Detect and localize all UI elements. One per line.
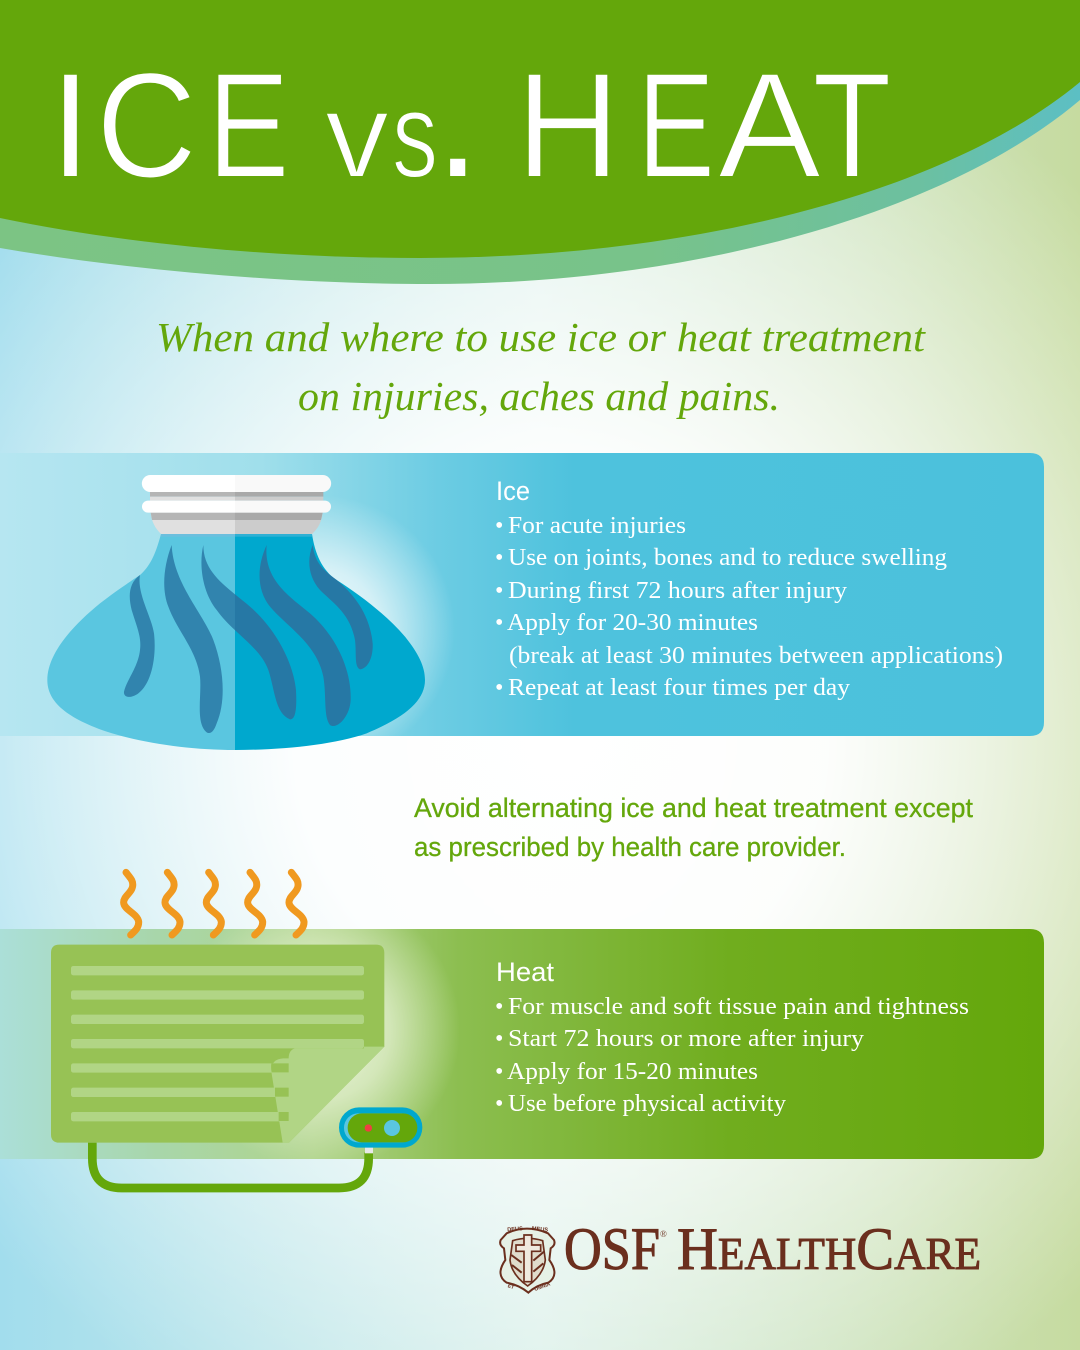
heading: ice: Ice — [496, 476, 530, 506]
header band — [0, 0, 1080, 284]
subtitle: on injuries, aches and pains. — [298, 373, 780, 419]
heat list: • — [495, 1059, 509, 1085]
icon: shield crest: DEUS — [507, 1226, 523, 1233]
ice list: Use on joints, bones and to reduce swelling — [508, 545, 947, 571]
title: . — [433, 15, 483, 216]
ice list: (break at least 30 minutes between applications) — [509, 643, 1003, 669]
title: s — [392, 67, 438, 203]
title: H — [516, 41, 620, 209]
ice list: • — [495, 610, 509, 636]
heading: heat: Heat — [496, 957, 554, 987]
ice list — [495, 513, 1003, 701]
subtitle: When and where to use ice or heat treatment — [156, 314, 927, 360]
wordmark: OSF — [564, 1216, 660, 1282]
icon: shield crest: ET — [507, 1283, 515, 1291]
pad — [51, 945, 384, 1143]
subtitle — [156, 314, 927, 419]
heat list — [495, 994, 969, 1117]
logo: OSF HealthCare: ® — [660, 1229, 667, 1239]
logo: OSF HealthCare: HEALTHCARE — [677, 1216, 981, 1282]
heat list: Use before physical activity — [508, 1091, 786, 1117]
title: E — [637, 41, 715, 209]
heat list: Start 72 hours or more after injury — [508, 1026, 864, 1052]
panel: ice background — [0, 453, 1044, 736]
heat list: Apply for 15-20 minutes — [507, 1059, 758, 1085]
heat list: • — [495, 1026, 509, 1052]
callout: avoid alternating: as prescribed by health care provider. — [414, 832, 846, 862]
heat list: • — [495, 994, 509, 1020]
cord — [92, 1143, 369, 1188]
icon: shield crest: OMNIA — [534, 1281, 552, 1293]
ice list: • — [495, 578, 509, 604]
ice list: • — [495, 513, 509, 539]
controller — [365, 1147, 373, 1153]
title — [48, 15, 892, 216]
title: E — [208, 41, 290, 209]
ice list: Repeat at least four times per day — [508, 675, 850, 701]
icon: ice bag — [47, 475, 425, 750]
callout: avoid alternating: Avoid alternating ice and heat treatment except — [414, 793, 973, 823]
ice list: • — [495, 675, 509, 701]
ice list: During first 72 hours after injury — [508, 578, 847, 604]
heat list: For muscle and soft tissue pain and tightness — [508, 994, 969, 1020]
logo: OSF HealthCare — [500, 1216, 981, 1293]
heat list: • — [495, 1091, 509, 1117]
ice list: For acute injuries — [508, 513, 686, 539]
steam — [124, 872, 304, 935]
text block: ice — [495, 476, 1003, 701]
icon: shield crest — [500, 1226, 555, 1293]
panel: heat background — [0, 929, 1044, 1159]
ice list: Apply for 20-30 minutes — [507, 610, 758, 636]
title: C — [96, 41, 197, 209]
title: A — [718, 41, 821, 209]
text block: heat — [495, 957, 969, 1117]
callout: avoid alternating — [414, 793, 973, 862]
title: T — [812, 41, 892, 209]
icon: shield crest: MEUS — [531, 1226, 549, 1234]
title: v — [325, 67, 389, 203]
ice list: • — [495, 545, 509, 571]
title: I — [48, 41, 92, 209]
icon: heating pad — [51, 872, 422, 1188]
